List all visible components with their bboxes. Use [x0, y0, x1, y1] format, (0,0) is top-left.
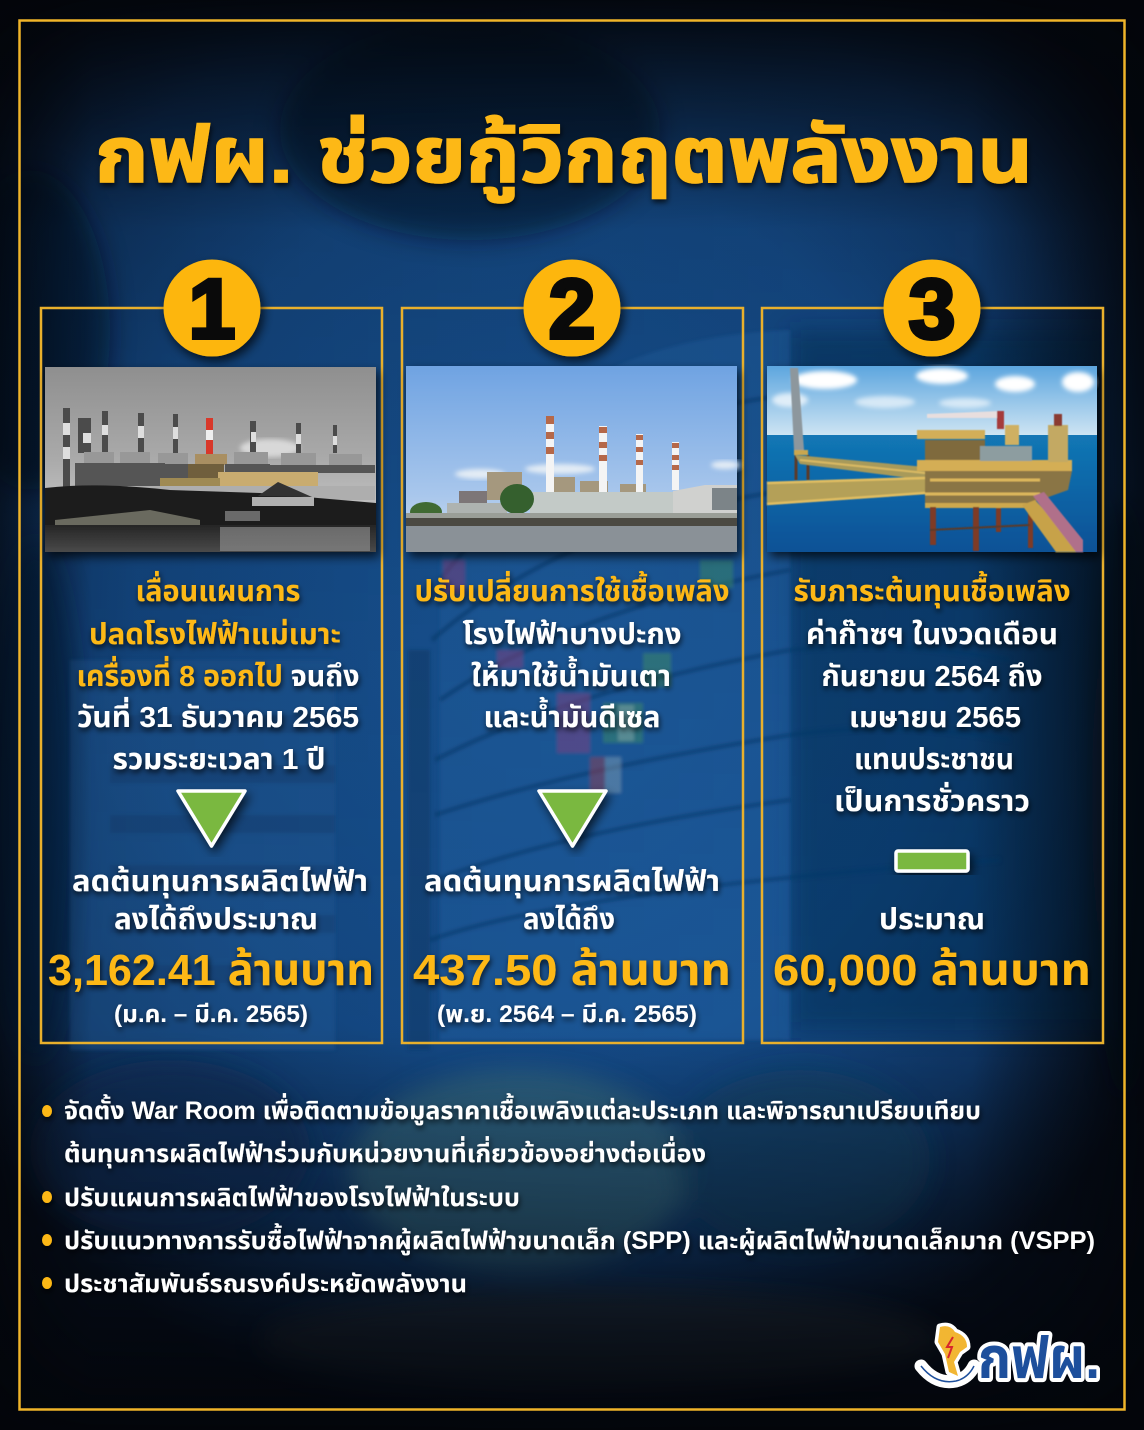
panel 1 [41, 260, 382, 1043]
badge 3 [884, 260, 980, 356]
bullet 1: จัดตั้ง War Room เพื่อติดตามข้อมูลราคาเชื้อเพลิงแต่ละประเภท และพิจารณาเปรียบเทียบ [64, 1093, 981, 1126]
icon: green down triangle [539, 791, 606, 846]
badge 3: 3 [909, 262, 955, 356]
result label 1: ลงได้ถึงประมาณ [114, 904, 318, 936]
description text 3: เมษายน 2565 [849, 702, 1021, 734]
panel 2 [402, 260, 743, 1043]
bullet 1: ต้นทุนการผลิตไฟฟ้าร่วมกับหน่วยงานที่เกี่ยวข้องอย่างต่อเนื่อง [64, 1136, 706, 1169]
description text 1: ปลดโรงไฟฟ้าแม่เมาะ [89, 619, 341, 651]
period 2: (พ.ย. 2564 – มี.ค. 2565) [437, 1001, 697, 1028]
result label 2 [424, 866, 720, 936]
badge 2: 2 [549, 262, 595, 356]
description text 3: เป็นการชั่วคราว [834, 781, 1030, 818]
badge 1: 1 [189, 262, 235, 356]
icon: green equal bar [896, 851, 968, 871]
description text 3 [794, 570, 1070, 818]
result label 3: ประมาณ [879, 904, 985, 936]
amount 1: 3,162.41 ล้านบาท [48, 946, 374, 995]
bullet 1 [42, 1093, 981, 1169]
description text 3: ค่าก๊าซฯ ในงวดเดือน [806, 619, 1058, 651]
result label 2: ลดต้นทุนการผลิตไฟฟ้า [424, 866, 720, 898]
panel 3 [762, 260, 1103, 1043]
title: กฟผ. ช่วยกู้วิกฤตพลังงาน [95, 111, 1033, 203]
photo: offshore gas platform [767, 366, 1097, 552]
badge 1 [164, 260, 260, 356]
description text 3: แทนประชาชน [854, 744, 1014, 776]
bullet 2: ปรับแผนการผลิตไฟฟ้าของโรงไฟฟ้าในระบบ [64, 1184, 520, 1212]
period 1: (ม.ค. – มี.ค. 2565) [114, 1001, 308, 1028]
result label 2: ลงได้ถึง [523, 904, 615, 936]
badge 2 [524, 260, 620, 356]
bullet 4: ประชาสัมพันธ์รณรงค์ประหยัดพลังงาน [64, 1270, 467, 1298]
description text 2: โรงไฟฟ้าบางปะกง [462, 619, 682, 651]
result label 1 [72, 866, 368, 936]
description text 2: ปรับเปลี่ยนการใช้เชื้อเพลิง [414, 570, 730, 608]
description text 1: รวมระยะเวลา 1 ปี [112, 744, 326, 776]
photo: Bang Pakong power plant [406, 366, 739, 552]
result label 1: ลดต้นทุนการผลิตไฟฟ้า [72, 866, 368, 898]
bullet list [42, 1093, 1095, 1298]
description text 1: วันที่ 31 ธันวาคม 2565 [77, 696, 359, 734]
description text 1: เครื่องที่ 8 ออกไป จนถึง [76, 655, 360, 693]
description text 2: และน้ำมันดีเซล [484, 696, 660, 734]
amount 3: 60,000 ล้านบาท [773, 946, 1091, 995]
description text 2: ให้มาใช้น้ำมันเตา [471, 655, 671, 693]
logo: EGAT [921, 1326, 1100, 1391]
description text 3: กันยายน 2564 ถึง [822, 661, 1042, 693]
description text 3: รับภาระต้นทุนเชื้อเพลิง [794, 570, 1070, 608]
description text 2 [414, 570, 730, 734]
photo: Mae Moh power plant [45, 367, 376, 552]
description text 1 [76, 570, 360, 776]
amount 2: 437.50 ล้านบาท [413, 946, 731, 995]
description text 1: เลื่อนแผนการ [136, 570, 300, 608]
icon: green down triangle [178, 791, 245, 846]
bullet 3: ปรับแนวทางการรับซื้อไฟฟ้าจากผู้ผลิตไฟฟ้าขนาดเล็ก (SPP) และผู้ผลิตไฟฟ้าขนาดเล็กมาก (VSPP) [64, 1223, 1095, 1256]
logo: EGAT: กฟผ. [978, 1326, 1100, 1391]
